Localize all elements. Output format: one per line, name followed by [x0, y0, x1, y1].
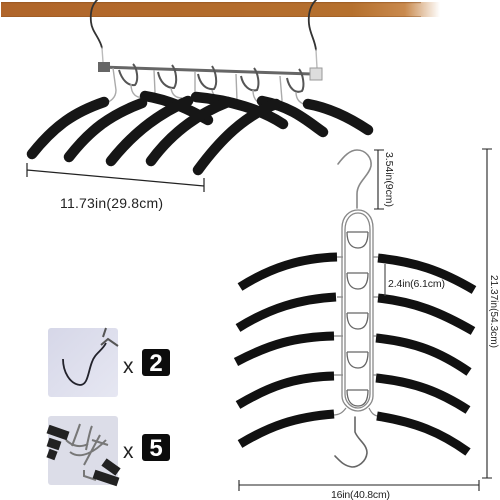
- top hook: [338, 150, 371, 208]
- left arms: [236, 257, 337, 444]
- bottom hook: [335, 417, 367, 467]
- width dimension: 11.73in: 11.73in(29.8cm): [60, 195, 163, 211]
- height dimension: 21.37in: 21.37in(54.3cm): [488, 275, 499, 348]
- hooks on rod: [91, 0, 317, 68]
- right arms: [376, 258, 474, 452]
- hook dimension: 3.54in: [374, 150, 395, 209]
- frame: [342, 210, 373, 411]
- frame rungs: [347, 232, 368, 406]
- hanging hangers photo: [32, 0, 368, 170]
- quantity: x 5: 5: [149, 435, 163, 462]
- quantity: x 2: [123, 349, 170, 378]
- wooden rod: [1, 2, 440, 17]
- hook dimension: 3.54in: 3.54in(9cm): [383, 152, 395, 207]
- rail: [98, 62, 322, 80]
- rings and clips: [119, 64, 303, 92]
- connectors: [333, 257, 378, 416]
- height dimension: 21.37in: [482, 149, 499, 478]
- thumbnail: hanger clips: [48, 416, 118, 485]
- quantity: x 5: [123, 434, 170, 463]
- spacing dimension: 2.4in: [385, 264, 445, 296]
- quantity: x 2: 2: [149, 350, 163, 377]
- foam arms: [32, 96, 368, 170]
- spacing dimension: 2.4in: 2.4in(6.1cm): [388, 278, 445, 290]
- quantity: x 2: x: [123, 355, 134, 378]
- thumbnail: hook: [48, 328, 118, 397]
- width dimension: 11.73in: [27, 163, 204, 211]
- quantity: x 5: x: [123, 440, 134, 463]
- total width dimension: 16in: [239, 480, 479, 500]
- unfolded multi hanger: [236, 150, 474, 467]
